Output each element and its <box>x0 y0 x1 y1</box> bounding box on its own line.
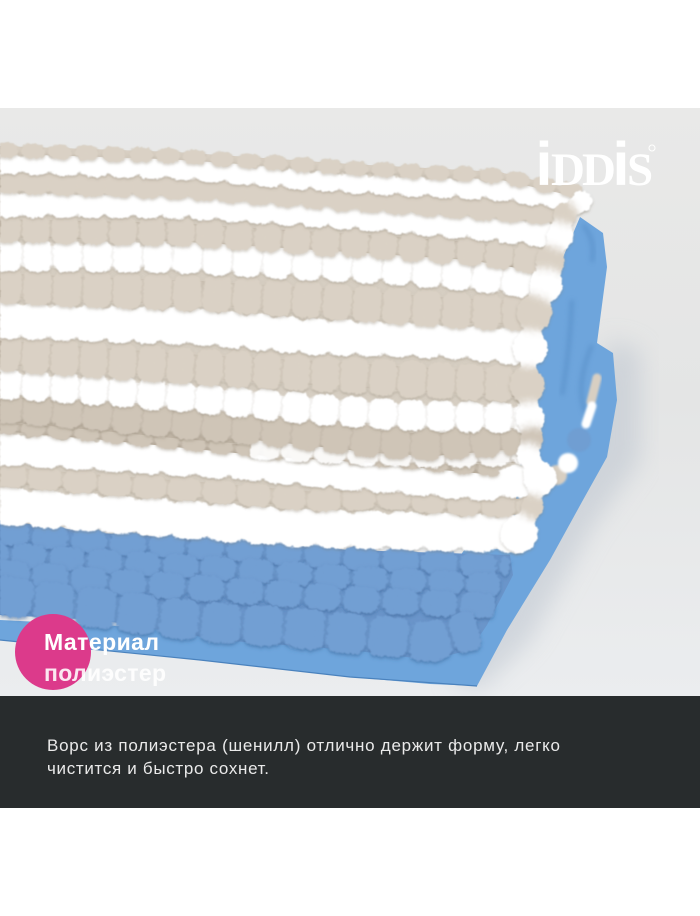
registered mark <box>649 145 655 151</box>
caption text: Ворс из полиэстера (шенилл) отлично держит форму, легко <box>47 736 560 755</box>
floor shadow of the mat <box>450 340 640 690</box>
roll side stripe ends <box>547 378 597 485</box>
photo background <box>0 108 700 696</box>
row end pompoms <box>500 190 593 553</box>
badge text: material: Материал <box>44 629 159 655</box>
photo: chenille bath mat <box>0 146 617 686</box>
pile base under the stripes <box>0 146 580 540</box>
logo: iDDiS: S <box>627 144 653 196</box>
mat binding: blue fabric edge <box>0 217 617 686</box>
badge: pink circle <box>15 614 91 690</box>
badge text: material: полиэстер <box>44 660 166 686</box>
logo: iDDiS: D <box>582 144 616 196</box>
logo: iDDiS <box>536 130 655 198</box>
logo: iDDiS: i <box>536 130 552 198</box>
logo: iDDiS: i <box>612 130 629 198</box>
dark caption band <box>0 696 700 808</box>
flat stripes <box>0 426 547 534</box>
caption text: чистится и быстро сохнет. <box>47 759 269 778</box>
caption text <box>47 736 560 778</box>
rolled stripes <box>0 150 588 458</box>
logo: iDDiS: D <box>551 144 585 196</box>
badge text: material <box>44 629 166 686</box>
blue pile section <box>0 520 513 660</box>
